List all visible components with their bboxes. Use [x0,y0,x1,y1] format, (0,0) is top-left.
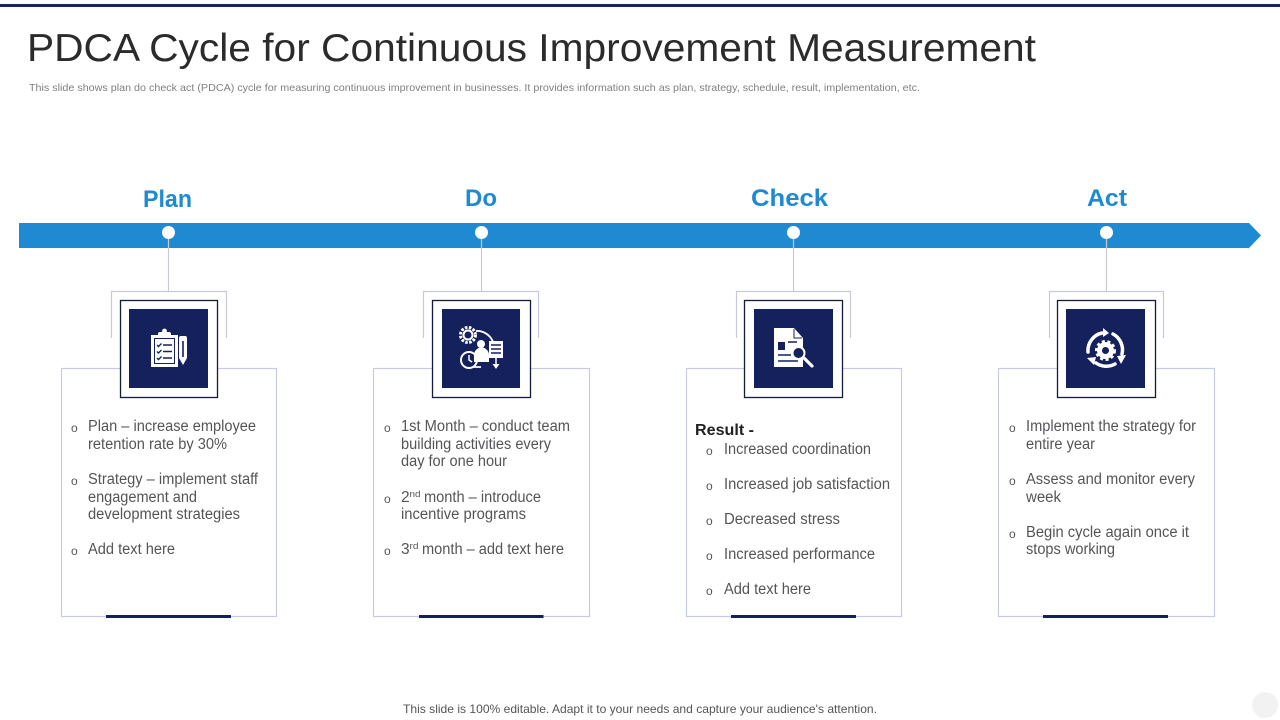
connector: Check [736,238,850,338]
text block: Do: o [384,421,391,435]
timeline dot: Act [1100,226,1113,239]
panel: Check [686,226,902,618]
text block: Check: Increased performance [724,546,875,563]
text block: Do: month – introduce [424,489,541,506]
card: Act [998,368,1214,616]
text block: Do: 1st Month – conduct team [401,418,570,435]
text block: Plan [71,418,259,558]
connector: Plan [112,238,226,338]
text block: Plan: retention rate by 30% [88,436,227,453]
icon frame: Check [744,300,842,398]
timeline dot: Do [475,226,488,239]
text block: Act: stops working [1026,541,1115,558]
card accent: Act [1043,615,1168,618]
panel: Do [374,226,590,618]
text block: Do [384,418,570,558]
text block: Act: o [1009,474,1016,488]
text block: Do: rd [410,541,418,552]
card accent: Plan [106,615,231,618]
icon frame: Do [432,300,530,398]
text block: Check: Increased job satisfaction [724,476,890,493]
text block: Do: 2 [401,489,410,506]
text block: Check: o [706,584,713,598]
text block: Do: o [384,544,391,558]
text block: Check: o [706,514,713,528]
text block: Plan: o [71,544,78,558]
text block: Act: Implement the strategy for [1026,418,1196,435]
text block: Check: o [706,479,713,493]
text block: Check: Result - [695,422,754,439]
timeline dot: Check [787,226,800,239]
icon frame: Plan [120,300,218,398]
text block: Check: o [706,549,713,563]
icon: gear with cycle arrows [1066,309,1145,388]
text block: Do: incentive programs [401,506,526,523]
card: Plan [62,368,276,616]
text block: Check: o [706,444,713,458]
text block: Check: Decreased stress [724,511,840,528]
text block: Act [1009,418,1196,558]
card accent: Do [419,615,544,618]
heading: Plan: Plan [143,186,192,213]
connector: Act [1050,238,1164,338]
icon: document with magnifier [754,309,833,388]
text block: Plan: Plan – increase employee [88,418,256,435]
corner badge [1252,692,1278,718]
text block: Act: o [1009,421,1016,435]
heading: Check: Check [751,185,828,212]
subtitle: This slide shows plan do check act (PDCA) cycle for measuring continuous improvement in businesses. It provides information such as plan, strategy, schedule, result, implementation, etc. [29,82,920,94]
connector: Do [424,238,538,338]
card: Do [374,368,590,616]
top rule [0,4,1280,7]
text block: Do: 3 [401,541,410,558]
text block: Do: nd [410,489,420,500]
text block: Act: Assess and monitor every [1026,471,1195,488]
text block: Do: o [384,492,391,506]
panel: Plan [62,226,276,618]
icon frame: Act [1058,300,1156,398]
text block: Do: building activities every [401,436,551,453]
text block: Check: Add text here [724,581,811,598]
text block: Plan: engagement and [88,489,197,506]
text block: Plan: development strategies [88,506,240,523]
text block: Plan: Strategy – implement staff [88,471,259,488]
title: PDCA Cycle for Continuous Improvement Measurement [27,27,1036,70]
panel: Act [998,226,1214,618]
footer note: This slide is 100% editable. Adapt it to your needs and capture your audience's attention. [403,702,877,716]
card accent: Check [731,615,856,618]
heading: Do: Do [465,185,497,212]
text block: Plan: o [71,421,78,435]
text block: Act: entire year [1026,436,1095,453]
card: Check [686,368,902,616]
text block: Do: month – add text here [422,541,564,558]
text block: Act: o [1009,527,1016,541]
text block: Check: Increased coordination [724,441,871,458]
text block: Act: week [1025,489,1061,506]
timeline arrow [19,223,1261,248]
text block: Plan: Add text here [88,541,175,558]
icon: team, gear and clock [442,309,520,388]
text block: Check [695,422,890,598]
icon: clipboard and pencil [129,309,208,388]
text block: Plan: o [71,474,78,488]
heading: Act: Act [1087,185,1127,212]
text block: Do: day for one hour [401,453,507,470]
timeline dot: Plan [162,226,175,239]
text block: Act: Begin cycle again once it [1026,524,1190,541]
